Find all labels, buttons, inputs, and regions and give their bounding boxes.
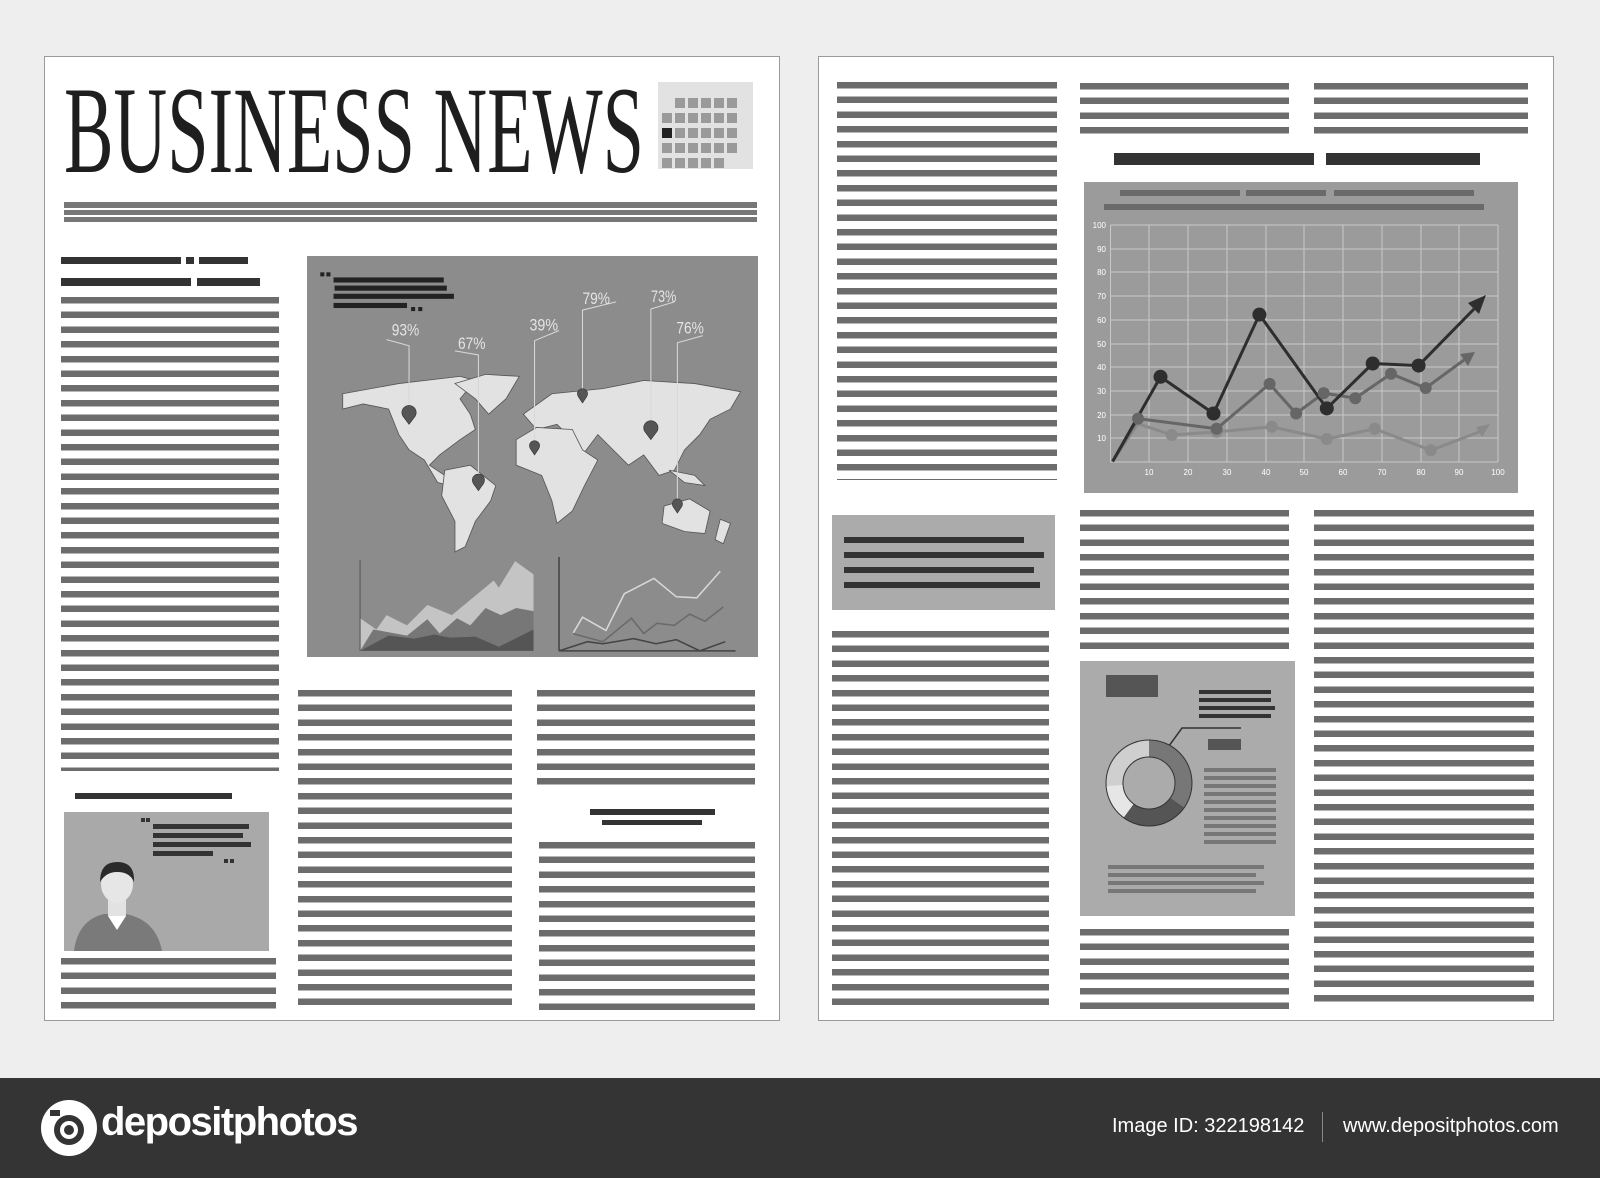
axis labels: 30 [1097,387,1107,396]
footer bar [0,1078,1600,1178]
right page [818,56,1554,1021]
brand name: depositphotos [101,1100,357,1144]
percentages: 93% [392,322,419,340]
percentages: 73% [651,288,676,306]
area chart [360,560,534,651]
map pointers [387,302,703,509]
axis labels: 60 [1097,316,1107,325]
text column 3 bottom [539,842,755,1010]
percentages [392,288,704,353]
axis labels: 100 [1093,221,1107,230]
right top text [1080,83,1289,134]
donut [1114,748,1184,818]
right col A2 text [832,631,1049,1010]
axis labels: 10 [1097,434,1107,443]
right col A text [837,82,1057,480]
axis labels: 90 [1097,245,1107,254]
text column 2 [298,690,512,1010]
column 3 headline [590,809,715,825]
right headline [1114,153,1480,165]
panel: line chart: 100 [1491,468,1505,477]
axis labels: 20 [1097,411,1107,420]
panel: line chart: 20 [1184,468,1193,477]
icon: person [74,862,162,951]
percentages: 67% [458,335,486,353]
image id: Image ID: 322198142 [1112,1115,1304,1137]
axis labels [1093,221,1107,443]
panel: line chart [1084,182,1518,493]
right col B bottom text [1080,929,1289,1010]
text column 3 top [537,690,755,786]
world map [343,374,741,552]
panel: line chart: 60 [1339,468,1348,477]
text below photo [61,958,276,1010]
panel: line chart: 80 [1417,468,1426,477]
panel: world map infographic [307,256,758,657]
left page [44,56,780,1021]
panel header text [320,272,454,311]
calendar icon [658,82,753,169]
percentages: 39% [529,316,558,334]
website: www.depositphotos.com [1343,1115,1559,1137]
percentages: 79% [582,290,610,308]
line chart [559,557,736,651]
panel: donut chart [1080,661,1295,916]
axis labels: 80 [1097,268,1107,277]
panel: line chart: 10 [1145,468,1154,477]
masthead rules [64,202,757,222]
right col C text [1314,510,1534,1010]
panel: line chart: 40 [1262,468,1271,477]
icon: camera logo [41,1100,97,1156]
grid [1110,225,1498,462]
right col B text [1080,510,1289,653]
panel: line chart: 90 [1455,468,1464,477]
axis labels: 70 [1097,292,1107,301]
gray callout box [832,515,1055,610]
panel: line chart: 50 [1300,468,1309,477]
photo headline [75,793,232,799]
axis labels: 50 [1097,340,1107,349]
percentages: 76% [676,320,704,338]
left text column [61,297,279,771]
photo box with portrait [64,812,269,951]
series lines [1113,309,1479,462]
axis labels: 40 [1097,363,1107,372]
panel: line chart: 70 [1378,468,1387,477]
panel: line chart: 30 [1223,468,1232,477]
left headline [61,257,260,286]
